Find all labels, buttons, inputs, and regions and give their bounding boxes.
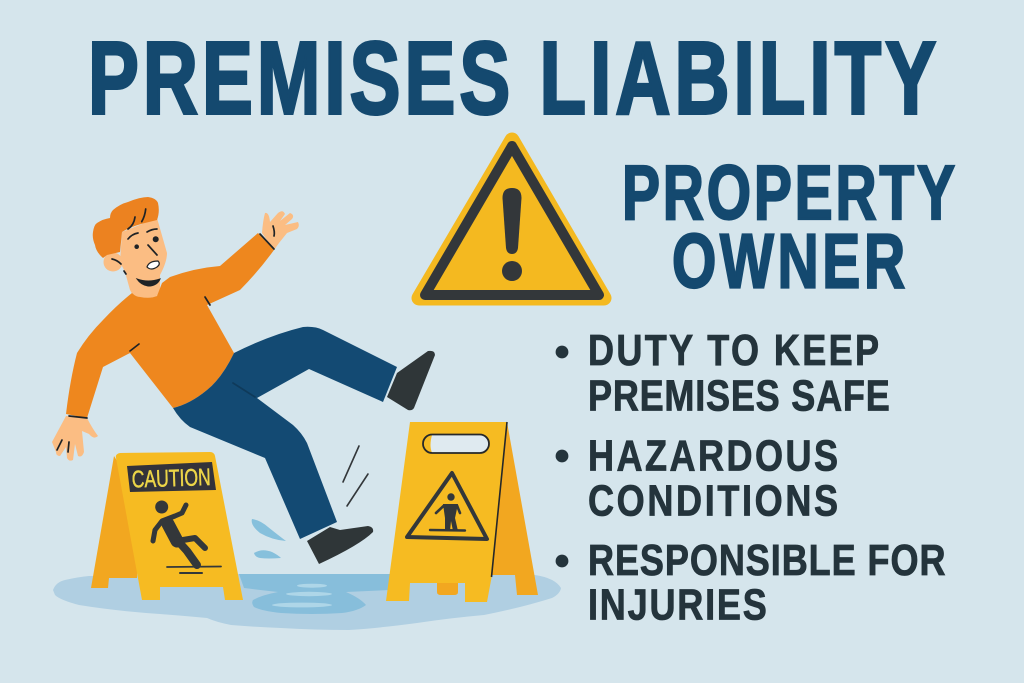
heading: property owner (622, 151, 955, 305)
bullet: hazardous conditions: CONDITIONS (588, 476, 838, 525)
bullet: responsible for injuries (556, 536, 946, 629)
bullet: duty to keep premises safe: PREMISES SAFE (588, 371, 890, 420)
water splashes (252, 519, 286, 558)
left hand (52, 416, 98, 461)
lower shoe (307, 526, 373, 564)
bullet: duty to keep premises safe: DUTY TO KEEP (588, 326, 879, 375)
sign handle (423, 434, 489, 453)
hazard sign, right (386, 422, 538, 602)
bullet: responsible for injuries: RESPONSIBLE FOR (588, 536, 946, 585)
title: PREMISES LIABILITY (88, 21, 936, 136)
heading: property owner: PROPERTY (622, 151, 955, 236)
icon: hazard triangle with person (407, 473, 487, 539)
right hand (262, 211, 299, 250)
caution label: CAUTION (131, 464, 211, 493)
jeans (173, 327, 397, 539)
falling man (52, 197, 435, 564)
motion lines (343, 446, 368, 506)
caution sign, left (91, 452, 243, 600)
heading: property owner: OWNER (672, 219, 905, 305)
bullet: duty to keep premises safe (556, 326, 890, 420)
sweater (66, 233, 274, 418)
bullet list (556, 326, 946, 629)
bullet: hazardous conditions (556, 431, 838, 525)
hair (93, 197, 159, 258)
neck and face (120, 218, 167, 298)
icon: falling person (153, 500, 221, 573)
bullet: responsible for injuries: INJURIES (588, 580, 767, 629)
wet floor puddle (53, 574, 561, 630)
ear (104, 252, 122, 272)
upper shoe (387, 351, 435, 410)
bullet: hazardous conditions: HAZARDOUS (588, 431, 838, 480)
face details (57, 209, 274, 452)
icon: warning triangle (419, 140, 604, 298)
